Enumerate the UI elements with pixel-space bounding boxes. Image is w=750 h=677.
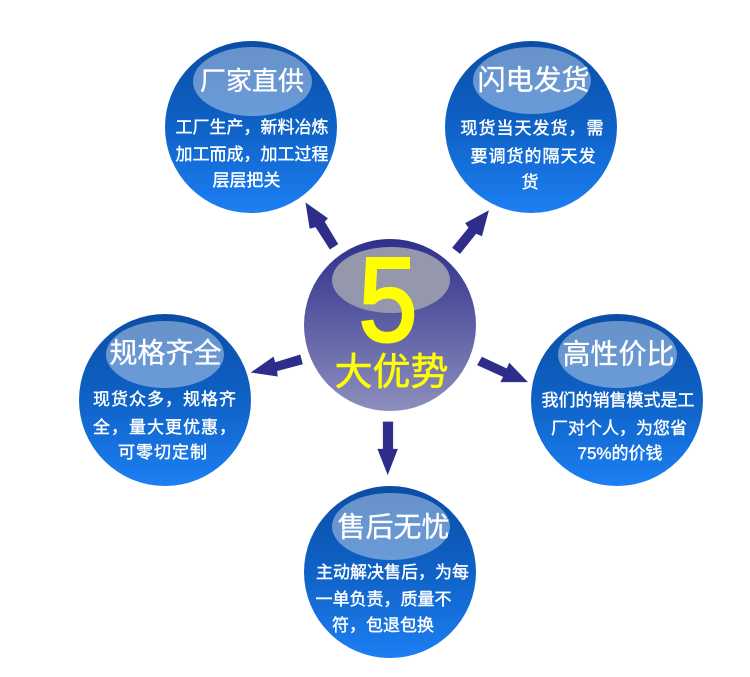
heading: 大优势: 大优势 bbox=[334, 352, 449, 394]
text block: 闪电发货 description: 货 bbox=[522, 173, 538, 192]
heading: 规格齐全: 规格齐全 bbox=[109, 338, 222, 368]
big number 5: 5 bbox=[359, 233, 417, 366]
heading: 厂家直供: 厂家直供 bbox=[200, 66, 304, 96]
text block: 售后无忧 description: 一单负责，质量不 bbox=[316, 590, 452, 609]
text block: 高性价比 description bbox=[542, 391, 694, 463]
text block: 厂家直供 description bbox=[176, 118, 328, 190]
text block: 规格齐全 description: 全，量大更优惠， bbox=[93, 418, 237, 437]
panel: center 5大优势 bbox=[304, 233, 476, 411]
panel: 规格齐全 bbox=[79, 314, 251, 486]
arrow: to 高性价比 bbox=[478, 357, 527, 382]
heading: 闪电发货: 闪电发货 bbox=[477, 64, 590, 96]
panel: 高性价比 bbox=[531, 314, 703, 486]
panel: 厂家直供 bbox=[165, 41, 337, 213]
text block: 厂家直供 description: 加工而成，加工过程 bbox=[176, 145, 328, 164]
arrow: to 规格齐全 bbox=[252, 355, 302, 376]
arrow: to 售后无忧 bbox=[378, 422, 397, 474]
text block: 厂家直供 description: 层层把关 bbox=[212, 171, 280, 190]
text block: 闪电发货 description: 要调货的隔天发 bbox=[470, 147, 596, 166]
text block: 闪电发货 description bbox=[460, 119, 604, 192]
panel: 闪电发货 bbox=[445, 41, 617, 213]
text block: 闪电发货 description: 现货当天发货，需 bbox=[460, 119, 604, 138]
text block: 高性价比 description: 我们的销售模式是工 bbox=[542, 391, 694, 410]
text block: 售后无忧 description: 符，包退包换 bbox=[332, 616, 434, 635]
text block: 厂家直供 description: 工厂生产，新料冶炼 bbox=[176, 118, 328, 137]
text block: 高性价比 description: 厂对个人，为您省 bbox=[551, 419, 687, 438]
text block: 售后无忧 description: 主动解决售后，为每 bbox=[316, 563, 469, 582]
panel: 售后无忧 bbox=[304, 486, 476, 658]
text block: 售后无忧 description bbox=[316, 563, 469, 635]
heading: 高性价比: 高性价比 bbox=[562, 338, 675, 370]
text block: 规格齐全 description: 可零切定制 bbox=[118, 443, 208, 462]
text block: 高性价比 description: 75%的价钱 bbox=[577, 444, 663, 463]
arrow: to 厂家直供 bbox=[306, 203, 338, 249]
heading: 售后无忧: 售后无忧 bbox=[337, 512, 450, 542]
text block: 规格齐全 description bbox=[93, 390, 237, 462]
arrow: to 闪电发货 bbox=[453, 211, 488, 253]
text block: 规格齐全 description: 现货众多，规格齐 bbox=[93, 390, 237, 409]
